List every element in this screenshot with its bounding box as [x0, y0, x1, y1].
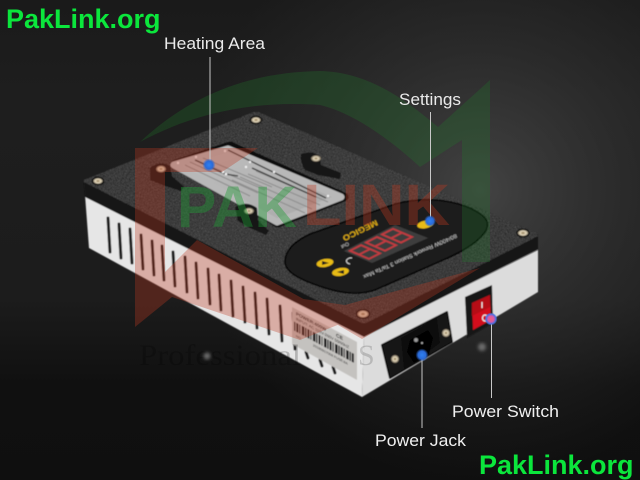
- LINK text: LINK: [303, 173, 450, 238]
- clamp: bottom: [235, 204, 269, 235]
- rating label: [292, 307, 357, 380]
- rating label: INPUT: AC 110V-260V 50/60HZ: [296, 316, 350, 350]
- callout: heating area: Heating Area: [164, 34, 266, 53]
- white left side face with vents: [85, 195, 364, 397]
- rating label: CE: [336, 333, 343, 342]
- heating area: [174, 146, 344, 223]
- rating label: NO:: [296, 334, 302, 341]
- device: [84, 112, 538, 397]
- green logo arc: [140, 71, 490, 262]
- rating label: 20180917008 FUSE:8A: [313, 343, 348, 366]
- callout: settings: Settings: [399, 90, 461, 109]
- PAK text: PAK: [177, 175, 297, 240]
- callout: heating area: [164, 34, 266, 172]
- control panel: [285, 200, 488, 293]
- corner screws: [92, 116, 529, 318]
- callout: power switch: Power Switch: [452, 402, 559, 421]
- professional text: Professional: [139, 339, 301, 372]
- callout: settings: [399, 90, 461, 227]
- digital display: [344, 225, 428, 263]
- black plate edge: [84, 182, 538, 337]
- watermark dots: [204, 343, 486, 360]
- callout: power jack: [375, 348, 467, 450]
- white right side face: [362, 250, 538, 397]
- brand: bottom right: PakLink.org: [479, 450, 634, 480]
- red logo mark: [135, 148, 480, 340]
- clamp: left: [150, 163, 184, 191]
- callout: power switch: [452, 312, 559, 421]
- solutions initial: S: [358, 339, 375, 372]
- brand: top left: PakLink.org: [6, 4, 161, 34]
- black top plate: [84, 112, 538, 323]
- rating label: POWER:400W: [296, 311, 327, 333]
- brand name: MEGICO: [341, 218, 379, 243]
- watermark: [135, 71, 490, 372]
- power switch: [465, 285, 493, 338]
- clamp: right: [301, 153, 341, 179]
- model text: 80/400W Rework Station 3 Ta/Ta Max: [362, 232, 458, 279]
- power jack: [382, 312, 452, 378]
- out label: Out: [339, 240, 350, 249]
- buttons: [316, 219, 434, 277]
- callout: power jack: Power Jack: [375, 431, 467, 450]
